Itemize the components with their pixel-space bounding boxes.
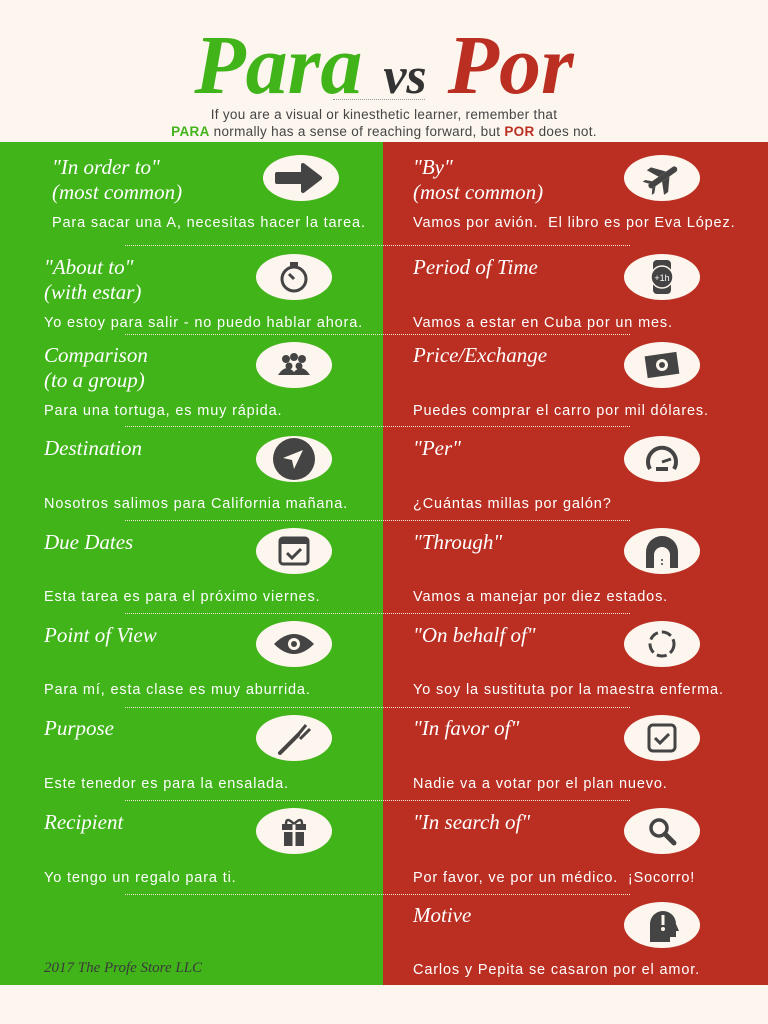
panel: por: Carlos y Pepita se casaron por el amor. [413, 962, 700, 978]
panel: para: Recipient [44, 810, 123, 834]
panel: por: Puedes comprar el carro por mil dólares. [413, 403, 709, 419]
heading: in order to [52, 155, 182, 204]
icon: plane [624, 155, 700, 201]
icon: eye [256, 621, 332, 667]
icon: gauge [624, 436, 700, 482]
icon: watch [624, 254, 700, 300]
icon: navigation [256, 436, 332, 482]
panel: para: Yo tengo un regalo para ti. [44, 870, 237, 886]
icon: magnifier [624, 808, 700, 854]
footer credit: 2017 The Profe Store LLC [44, 960, 202, 976]
panel: para: Esta tarea es para el próximo viernes. [44, 589, 320, 605]
panel: por: Vamos a manejar por diez estados. [413, 589, 668, 605]
panel: por: ¿Cuántas millas por galón? [413, 496, 612, 512]
icon: calendar [256, 528, 332, 574]
icon: gift [256, 808, 332, 854]
panel: para: Yo estoy para salir - no puedo hablar ahora. [44, 315, 363, 331]
icon: head [624, 902, 700, 948]
icon: checkbox [624, 715, 700, 761]
panel: para: Point of View [44, 623, 157, 647]
icon: tunnel [624, 528, 700, 574]
panel: para: Nosotros salimos para California mañana. [44, 496, 348, 512]
panel: para: (with estar) [44, 280, 141, 304]
panel: por: "In favor of" [413, 716, 519, 740]
panel: para: Para mí, esta clase es muy aburrida. [44, 682, 311, 698]
panel: para: "About to" [44, 255, 133, 279]
panel: por: "Per" [413, 436, 461, 460]
panel: por: "By" [413, 155, 453, 179]
panel: por: Por favor, ve por un médico. ¡Socorro! [413, 870, 695, 886]
panel: para: (to a group) [44, 368, 145, 392]
panel: por: Yo soy la sustituta por la maestra enferma. [413, 682, 724, 698]
panel: por: Nadie va a votar por el plan nuevo. [413, 776, 668, 792]
icon: money [624, 342, 700, 388]
icon: group [256, 342, 332, 388]
panel: por: "On behalf of" [413, 623, 536, 647]
panel: para: Destination [44, 436, 142, 460]
panel: por: Motive [413, 903, 471, 927]
icon: watch: +1h [654, 273, 670, 283]
icon: cycle [624, 621, 700, 667]
panel: por [383, 142, 768, 985]
panel: por: Vamos a estar en Cuba por un mes. [413, 315, 673, 331]
icon: stopwatch [256, 254, 332, 300]
heading: in order to: "In order to" [52, 155, 160, 179]
subtitle: If you are a visual or kinesthetic learner, remember that [211, 107, 557, 122]
panel: para [0, 142, 383, 985]
panel: por: Period of Time [413, 255, 538, 279]
panel: por: Price/Exchange [413, 343, 547, 367]
panel: por: "In search of" [413, 810, 530, 834]
panel: para: Para una tortuga, es muy rápida. [44, 403, 282, 419]
panel: para: Este tenedor es para la ensalada. [44, 776, 289, 792]
subtitle: PARA normally has a sense of reaching forward, but POR does not. [171, 124, 597, 139]
panel: por: "Through" [413, 530, 502, 554]
icon: arrow [263, 155, 339, 201]
panel: para: Comparison [44, 343, 148, 367]
panel: para: Para sacar una A, necesitas hacer la tarea. [52, 215, 366, 231]
panel: por: Vamos por avión. El libro es por Eva López. [413, 215, 735, 231]
panel: por: (most common) [413, 180, 543, 204]
subtitle [171, 107, 597, 139]
panel: para: Purpose [44, 716, 114, 740]
panel: para: Due Dates [44, 530, 133, 554]
title: Para vs Por [194, 19, 574, 112]
icon: fork [256, 715, 332, 761]
heading: in order to: (most common) [52, 180, 182, 204]
